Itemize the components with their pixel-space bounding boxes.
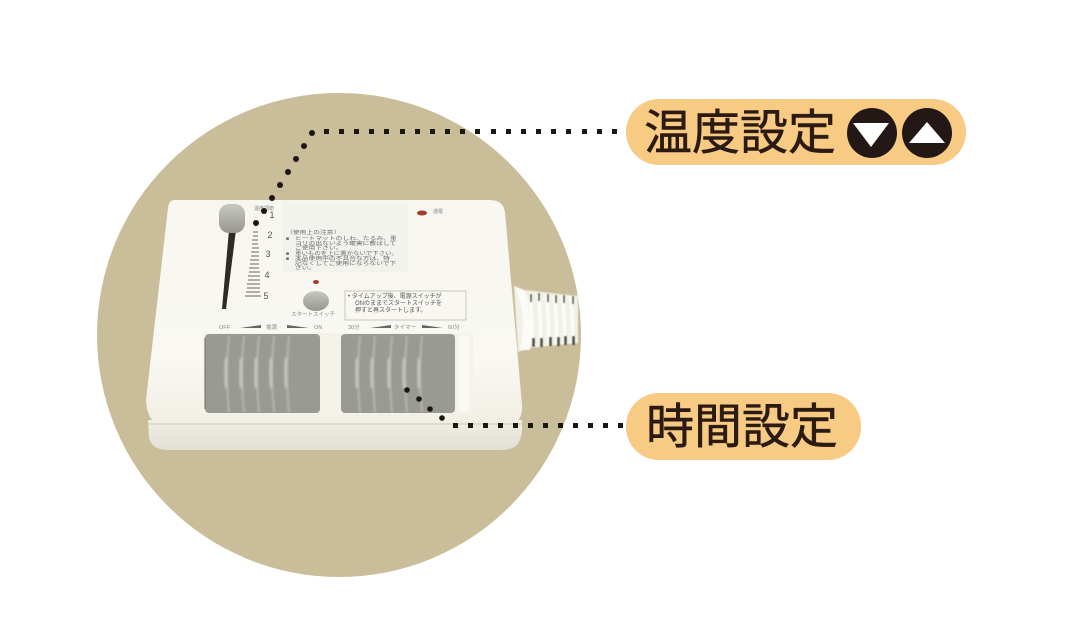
- switch labels: ON: [314, 325, 322, 331]
- switch labels: OFF: [219, 325, 231, 331]
- start switch: スタートスイッチ: [291, 310, 335, 318]
- timer note: 押すと再スタートします。: [355, 306, 426, 314]
- scale title: 温度調節: [254, 205, 274, 212]
- callout: time setting: [626, 393, 861, 460]
- caution text: 〔使用上の注意〕: [286, 229, 340, 236]
- scale numbers: 2: [267, 230, 273, 240]
- switch labels: [219, 323, 460, 331]
- indicator lamp: power on: 通電: [433, 208, 443, 215]
- switch labels: 60分: [448, 323, 460, 331]
- switch labels: タイマー: [394, 323, 416, 331]
- switch recess: [203, 333, 473, 415]
- caution text: さい。: [295, 265, 315, 271]
- callout: temperature setting: [626, 99, 966, 165]
- icon: down arrow: [847, 108, 897, 158]
- dotted leader: timer: [404, 387, 623, 428]
- timer note: ONのままでスタートスイッチを: [355, 299, 442, 307]
- indicator lamp: power on: [417, 208, 443, 216]
- caution text: ■: [286, 256, 289, 262]
- caution text: [286, 229, 398, 271]
- scale numbers: 1: [269, 210, 275, 220]
- caution text: ■: [286, 251, 289, 257]
- temperature scale ticks: [245, 232, 261, 296]
- timer note: [345, 291, 466, 320]
- start switch: [291, 291, 335, 318]
- switch labels: 電源: [266, 323, 278, 331]
- caution text: ■: [286, 236, 289, 242]
- caution text: 記なくしてご使用にならないで下: [295, 260, 396, 267]
- power switch: [205, 334, 320, 413]
- caution text: ご使用下さい。: [295, 245, 342, 251]
- scale numbers: 3: [265, 249, 271, 259]
- switch labels: 30分: [348, 323, 360, 331]
- timer note: • タイムアップ後、電源スイッチが: [348, 292, 442, 300]
- timer switch: [341, 334, 455, 413]
- scale numbers: [263, 210, 275, 301]
- background circle: [97, 93, 581, 577]
- callout: temperature setting: 温度設定: [644, 107, 836, 160]
- caution text: ヒートマットのしわ、たるみ、重: [295, 235, 397, 242]
- icon: power cord: [514, 286, 578, 352]
- caution text: 重いものを上に置かないで下さい。: [295, 250, 398, 257]
- dotted leader: temperature: [253, 129, 617, 226]
- icon: up arrow: [902, 108, 952, 158]
- scale numbers: 5: [263, 291, 269, 301]
- caution text: ヨリの出ないよう確実に敷ばして: [295, 240, 396, 247]
- panel: controller device: [146, 200, 522, 450]
- caution text: 本品使用中の不具合な方は、特: [295, 255, 390, 262]
- callout: time setting: 時間設定: [646, 401, 838, 454]
- indicator lamp: timer: [313, 280, 319, 284]
- slider: [219, 204, 245, 309]
- scale numbers: 4: [264, 270, 270, 280]
